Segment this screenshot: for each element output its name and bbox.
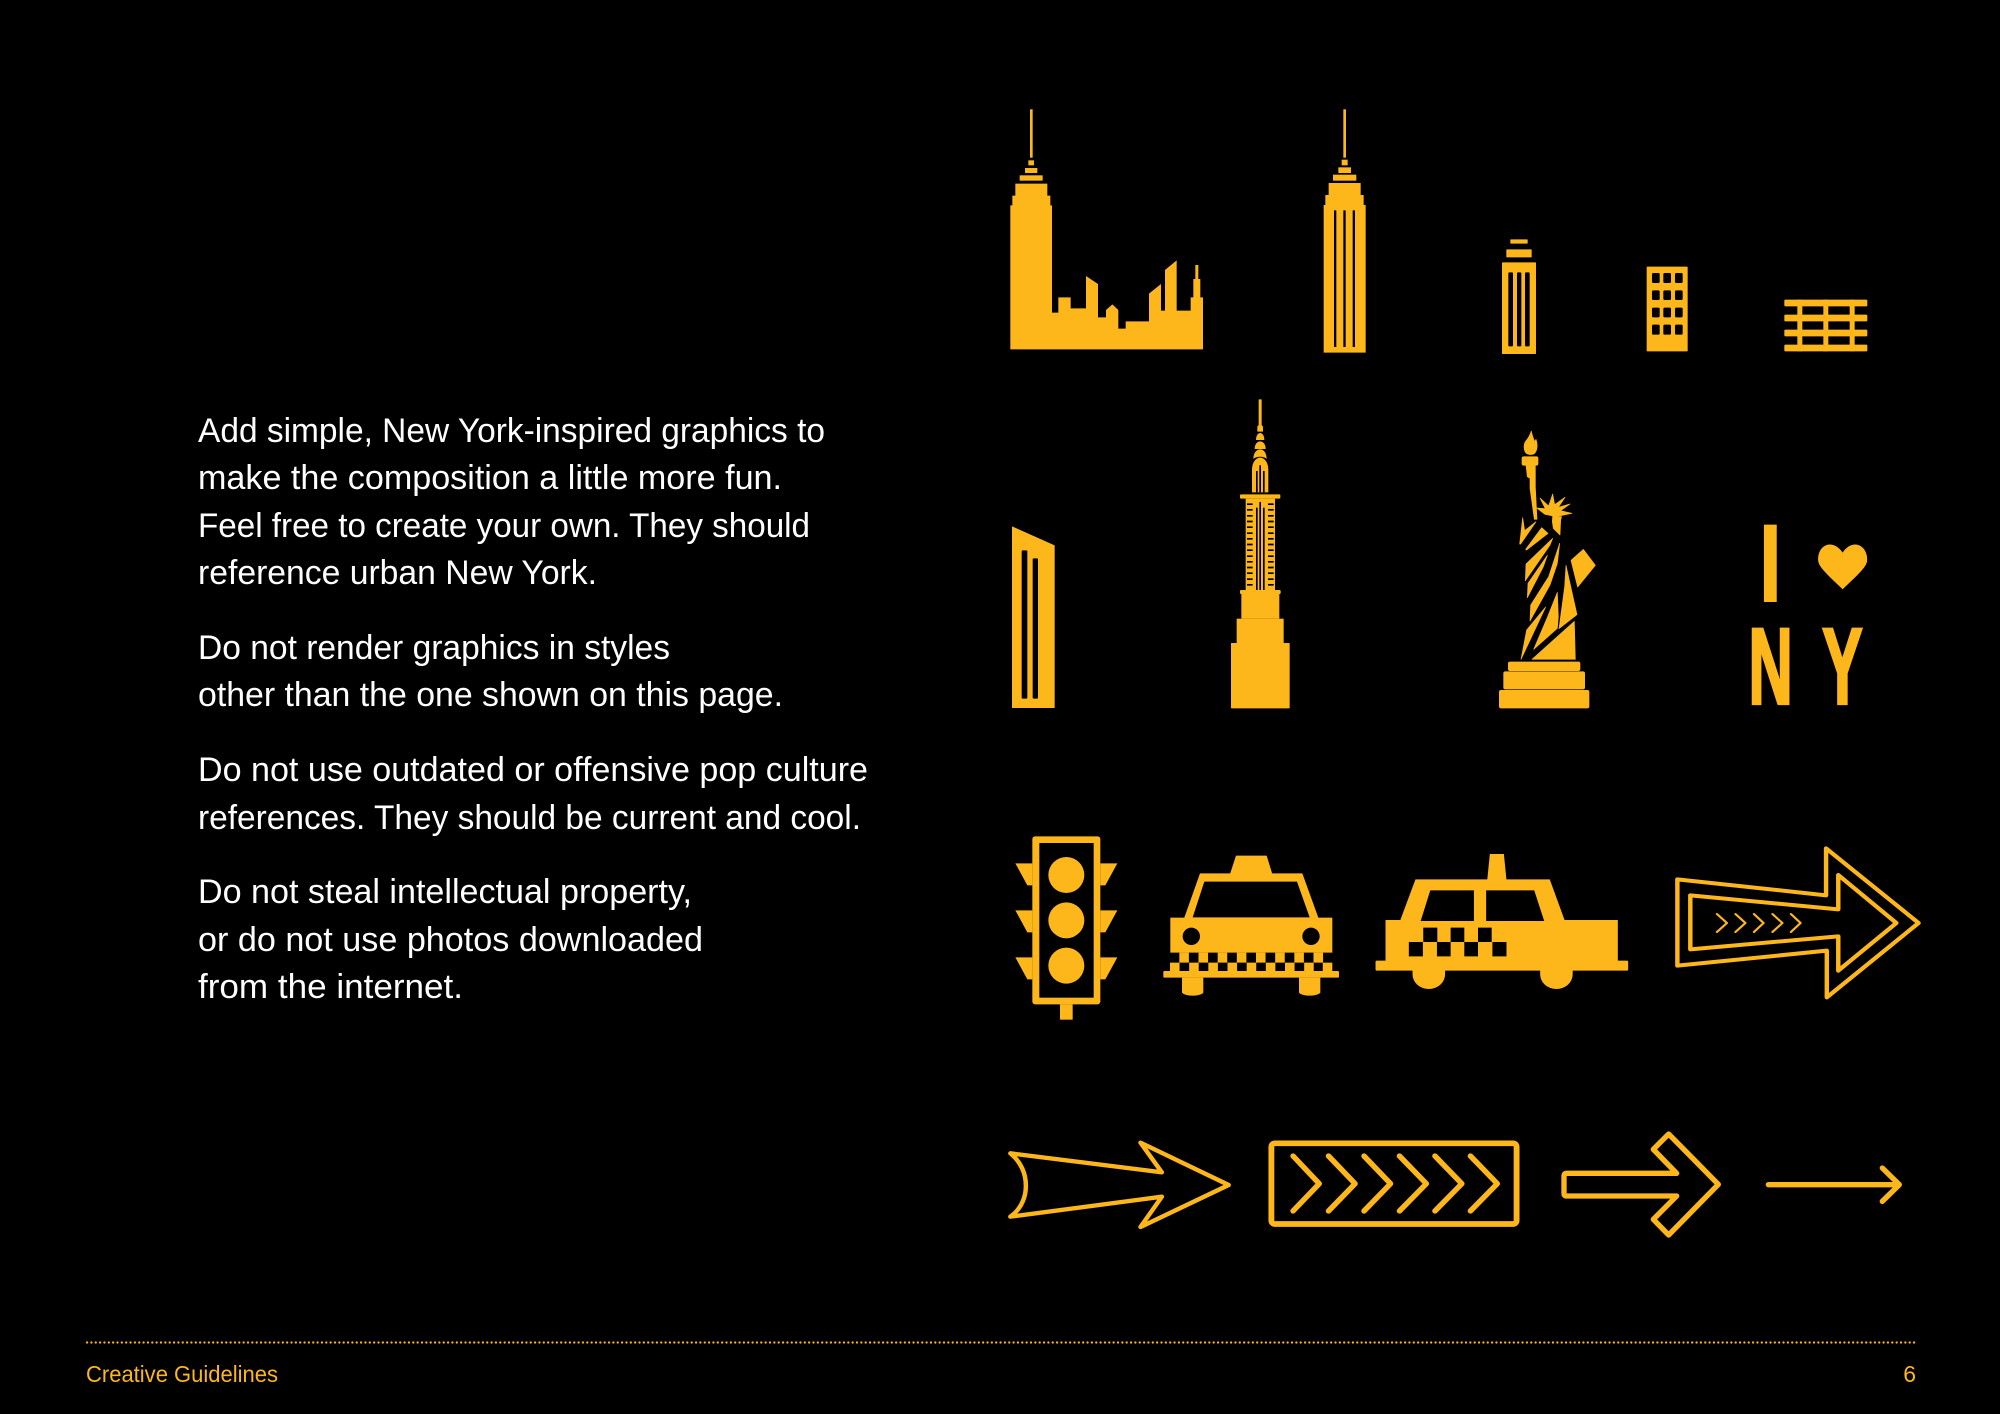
footer [86,1342,1916,1387]
icon: I heart NY: Y [1822,607,1862,727]
arrow: block outline arrow [1564,1134,1718,1235]
icon: wedge tower [1012,526,1055,708]
icon: Statue of Liberty [1499,431,1595,708]
arrow: chevron box [1271,1143,1517,1224]
icon: traffic light [1015,836,1117,1020]
page number: 6 [1903,1361,1916,1387]
paragraph: add graphics: Feel free to create your own. They should [198,507,810,545]
icon: I heart NY [1749,500,1867,727]
icon: I heart NY: N [1749,607,1793,727]
icon: office building [1647,267,1688,351]
icon: low-rise building [1784,300,1867,351]
icon: Empire State tower [1324,109,1366,353]
paragraph: add graphics: reference urban New York. [198,554,597,592]
footer label: Creative Guidelines [86,1361,278,1387]
arrow: large neon arrow [1677,848,1919,997]
arrow: thin line arrow [1768,1168,1899,1201]
paragraph: styles [198,629,783,714]
icon: small tower [1502,239,1536,354]
text block: guidelines copy [198,412,868,1006]
paragraph: styles: Do not render graphics in styles [198,629,670,667]
icon: I heart NY: I [1758,500,1783,626]
paragraph: pop culture: Do not use outdated or offensive pop culture [198,751,868,789]
paragraph: pop culture [198,751,868,837]
paragraph: intellectual property: Do not steal intellectual property, [198,873,692,911]
paragraph: add graphics: Add simple, New York-inspired graphics to [198,412,825,450]
paragraph: intellectual property: from the internet. [198,968,463,1006]
paragraph: add graphics: make the composition a little more fun. [198,459,782,497]
paragraph: intellectual property: or do not use photos downloaded [198,921,703,959]
paragraph: intellectual property [198,873,703,1006]
paragraph: pop culture: references. They should be current and cool. [198,799,861,837]
paragraph: add graphics [198,412,825,592]
arrow: curved tail outline arrow [1010,1143,1229,1227]
paragraph: styles: other than the one shown on this page. [198,676,783,714]
icon: Chrysler building [1231,399,1290,708]
icon: taxi side view [1376,854,1628,989]
icon: skyline with Empire State [1010,109,1203,349]
icon: taxi front view [1163,856,1339,996]
